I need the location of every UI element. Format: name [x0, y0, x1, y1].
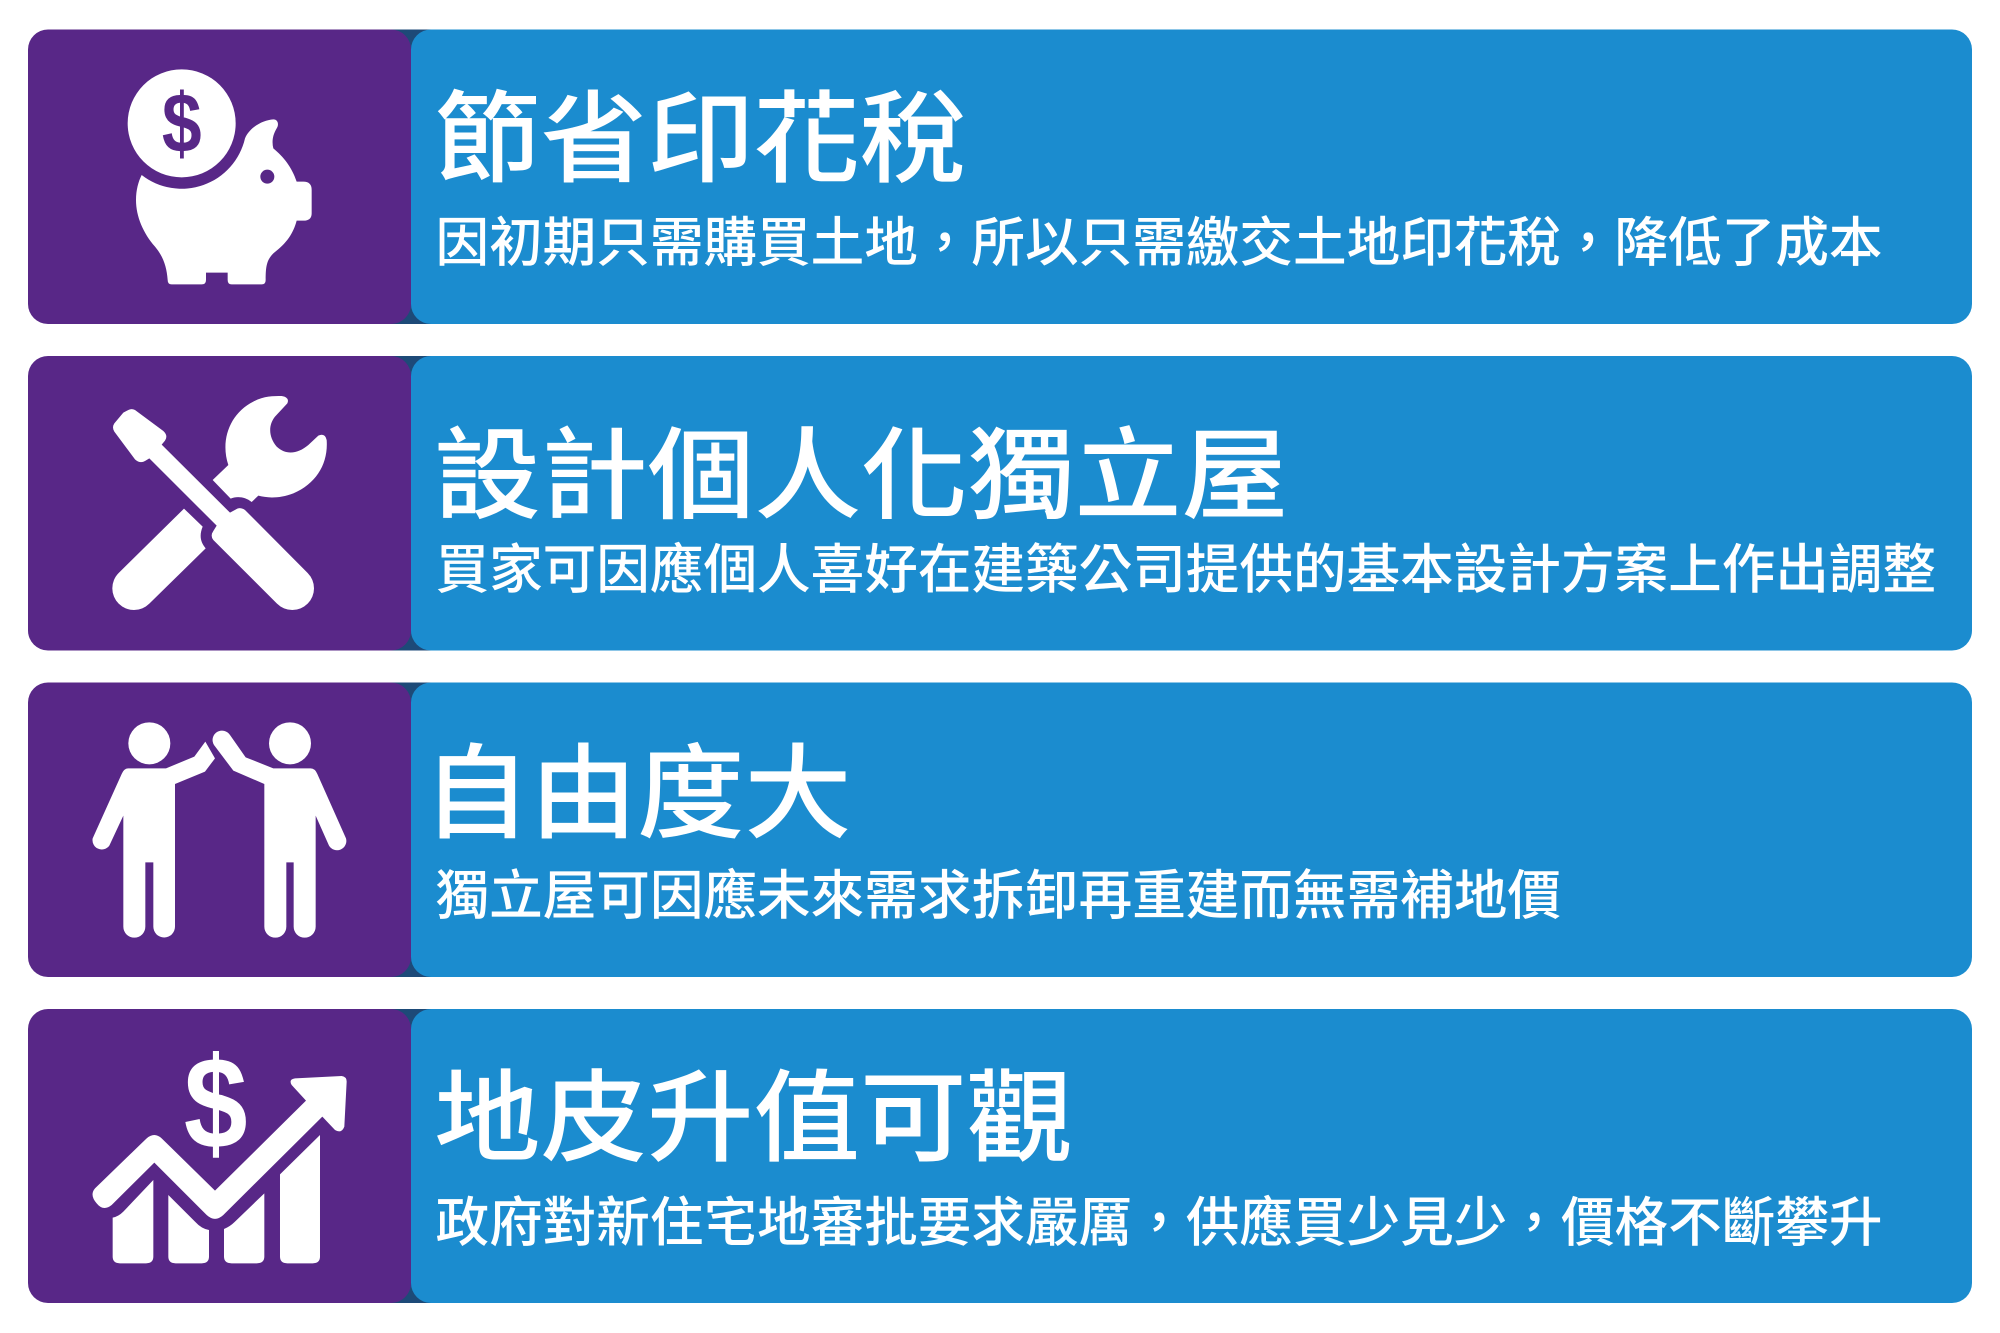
icon: piggy bank with coin — [128, 69, 312, 284]
icon panel: purple background — [28, 1009, 411, 1303]
description: 買家可因應個人喜好在建築公司提供的基本設計方案上作出調整 — [436, 540, 1936, 600]
icon panel: purple background — [28, 30, 411, 324]
icon: rising chart with dollar sign: $ — [184, 1031, 247, 1177]
panel: high freedom — [28, 682, 1972, 977]
icon: two people high five — [92, 722, 346, 938]
title: 節省印花稅 — [434, 83, 966, 195]
description: 因初期只需購買土地，所以只需繳交土地印花稅，降低了成本 — [436, 213, 1883, 273]
icon: piggy bank with coin: $ — [162, 75, 202, 170]
icon panel: purple background — [28, 682, 411, 977]
panel: personalised design — [28, 356, 1972, 650]
panel: land appreciation — [28, 1009, 1972, 1303]
description: 政府對新住宅地審批要求嚴厲，供應買少見少，價格不斷攀升 — [436, 1193, 1883, 1253]
text panel: blue background — [411, 682, 1972, 977]
title: 自由度大 — [423, 737, 851, 852]
icon panel: purple background — [28, 356, 411, 650]
title: 設計個人化獨立屋 — [434, 420, 1288, 532]
title: 地皮升值可觀 — [434, 1062, 1073, 1174]
icon: crossed screwdriver and wrench — [112, 396, 327, 610]
text panel: blue background — [411, 356, 1972, 650]
panel: saving stamp duty — [28, 30, 1972, 324]
text panel: blue background — [411, 30, 1972, 324]
description: 獨立屋可因應未來需求拆卸再重建而無需補地價 — [436, 866, 1561, 926]
text panel: blue background — [411, 1009, 1972, 1303]
icon: rising chart with dollar sign — [93, 1031, 347, 1263]
